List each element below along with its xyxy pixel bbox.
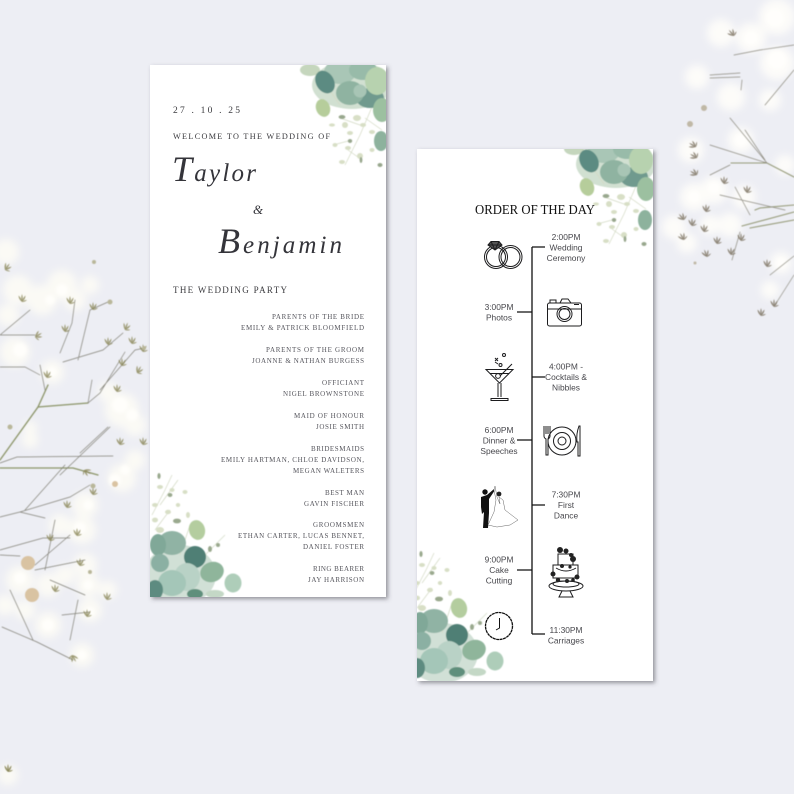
wedding party list: PARENTS OF THE GROOM <box>266 346 365 354</box>
wedding party list: JOSIE SMITH <box>316 423 364 431</box>
timeline <box>517 247 545 634</box>
foliage: top right <box>300 60 392 167</box>
wedding party list: BRIDESMAIDS <box>311 445 364 453</box>
foliage: bottom left <box>417 550 504 681</box>
icon: camera <box>548 299 582 326</box>
event: 9:00PM cake cutting: 9:00PM <box>485 554 513 564</box>
icon: plate and cutlery <box>544 426 580 456</box>
wedding party list: JOANNE & NATHAN BURGESS <box>252 357 364 365</box>
event: 4:00PM cocktails and nibbles: Cocktails & <box>545 372 587 382</box>
icon: clock <box>486 612 512 640</box>
wedding party list: EMILY & PATRICK BLOOMFIELD <box>241 324 364 332</box>
baby's breath sprig: top right <box>662 0 794 316</box>
event: 11:30PM carriages: Carriages <box>548 636 584 646</box>
event: 2:00PM wedding ceremony: Ceremony <box>547 253 586 263</box>
wedding party list: EMILY HARTMAN, CHLOE DAVIDSON, <box>221 456 364 464</box>
wedding party list: JAY HARRISON <box>308 576 364 584</box>
event: 6:00PM dinner and speeches: 6:00PM <box>485 425 513 435</box>
wedding party list: PARENTS OF THE BRIDE <box>272 313 364 321</box>
event: 11:30PM carriages: 11:30PM <box>550 625 582 635</box>
wedding party list: ETHAN CARTER, LUCAS BENNET, <box>238 532 364 540</box>
event: 3:00PM photos: 3:00PM <box>485 302 513 312</box>
event: 4:00PM cocktails and nibbles: 4:00PM - <box>549 362 583 372</box>
wedding party list <box>221 313 365 584</box>
event: 2:00PM wedding ceremony: Wedding <box>550 242 583 252</box>
welcome line: WELCOME TO THE WEDDING OF <box>173 132 330 141</box>
event: 6:00PM dinner and speeches: Speeches <box>480 446 518 456</box>
panel: order of the day card <box>406 139 656 683</box>
event: 7:30PM first dance: First <box>558 500 575 510</box>
wedding party list: MEGAN WALETERS <box>293 467 364 475</box>
foliage: bottom left <box>150 472 242 597</box>
wedding party list: DANIEL FOSTER <box>303 543 364 551</box>
foliage: top right <box>564 149 653 246</box>
event: 2:00PM wedding ceremony: 2:00PM <box>552 232 580 242</box>
wedding party list: RING BEARER <box>313 565 364 573</box>
icon: tiered cake <box>549 547 583 597</box>
event: 9:00PM cake cutting: Cutting <box>486 576 513 586</box>
heading: the wedding party: THE WEDDING PARTY <box>173 285 288 295</box>
heading: order of the day: ORDER OF THE DAY <box>475 202 595 217</box>
icon: wedding rings <box>484 242 522 268</box>
panel: welcome card <box>144 60 392 605</box>
event: 4:00PM cocktails and nibbles: Nibbles <box>552 382 580 392</box>
event: 3:00PM photos: Photos <box>486 312 512 322</box>
date: 27 . 10 . 25 <box>173 106 240 116</box>
baby's breath sprig: left <box>0 239 148 785</box>
wedding party list: GAVIN FISCHER <box>304 500 364 508</box>
wedding party list: BEST MAN <box>325 489 364 497</box>
event: 6:00PM dinner and speeches: Dinner & <box>483 436 516 446</box>
icon: cocktail glass <box>486 354 513 400</box>
event: 7:30PM first dance: 7:30PM <box>552 490 580 500</box>
icon: dancing couple <box>481 486 518 528</box>
wedding party list: GROOMSMEN <box>313 521 364 529</box>
name: Benjamin: Benjamin <box>218 221 342 261</box>
event: 7:30PM first dance: Dance <box>554 510 578 520</box>
event: 9:00PM cake cutting: Cake <box>489 565 509 575</box>
wedding party list: NIGEL BROWNSTONE <box>283 390 364 398</box>
ampersand: & <box>253 202 264 217</box>
name: Taylor: Taylor <box>172 149 256 189</box>
wedding party list: OFFICIANT <box>322 379 365 387</box>
wedding party list: MAID OF HONOUR <box>294 412 364 420</box>
